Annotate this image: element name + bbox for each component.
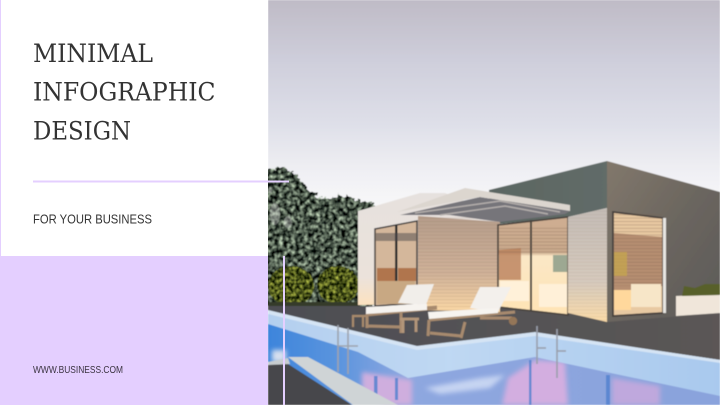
vertical accent line xyxy=(283,256,285,405)
lounger one xyxy=(366,284,437,333)
water reflections xyxy=(272,350,660,405)
hedges xyxy=(268,266,360,306)
title: DESIGN xyxy=(33,116,131,146)
left accent strip xyxy=(0,0,1,256)
pool tile wall xyxy=(268,311,720,396)
left pool ladder xyxy=(338,325,358,374)
left glazed door xyxy=(375,221,417,306)
pool water xyxy=(268,322,720,405)
title xyxy=(33,39,216,146)
corner pillar xyxy=(568,208,607,322)
right glazed window xyxy=(613,212,663,316)
sun loungers xyxy=(352,284,517,338)
title: MINIMAL xyxy=(33,39,153,68)
canopy xyxy=(397,188,570,222)
title: INFOGRAPHIC xyxy=(33,78,216,106)
photo: pool house at dusk xyxy=(262,0,720,405)
deck xyxy=(268,306,720,360)
pool xyxy=(268,310,720,405)
near deck corner xyxy=(268,357,398,405)
panel: white title panel xyxy=(1,0,268,256)
side table xyxy=(400,319,419,333)
main glazed front xyxy=(498,217,568,315)
sky xyxy=(268,0,720,315)
planter xyxy=(676,284,720,316)
green upper wall xyxy=(489,161,607,225)
white left volume xyxy=(358,193,500,305)
right pool ladder xyxy=(537,326,566,378)
beige tiled wall xyxy=(418,216,500,312)
subtitle: FOR YOUR BUSINESS xyxy=(33,212,152,226)
trees xyxy=(262,168,380,306)
stool xyxy=(352,316,366,327)
brown right wall xyxy=(607,161,720,322)
gaps in the tree canopy xyxy=(268,187,292,228)
panel: lilac footer panel xyxy=(0,256,268,405)
pool coping xyxy=(268,310,720,363)
horizontal accent line xyxy=(33,180,289,182)
blue reflection streaks xyxy=(374,360,610,405)
lounger two xyxy=(428,287,517,338)
website url: WWW.BUSINESS.COM xyxy=(33,365,123,376)
building xyxy=(358,161,720,322)
